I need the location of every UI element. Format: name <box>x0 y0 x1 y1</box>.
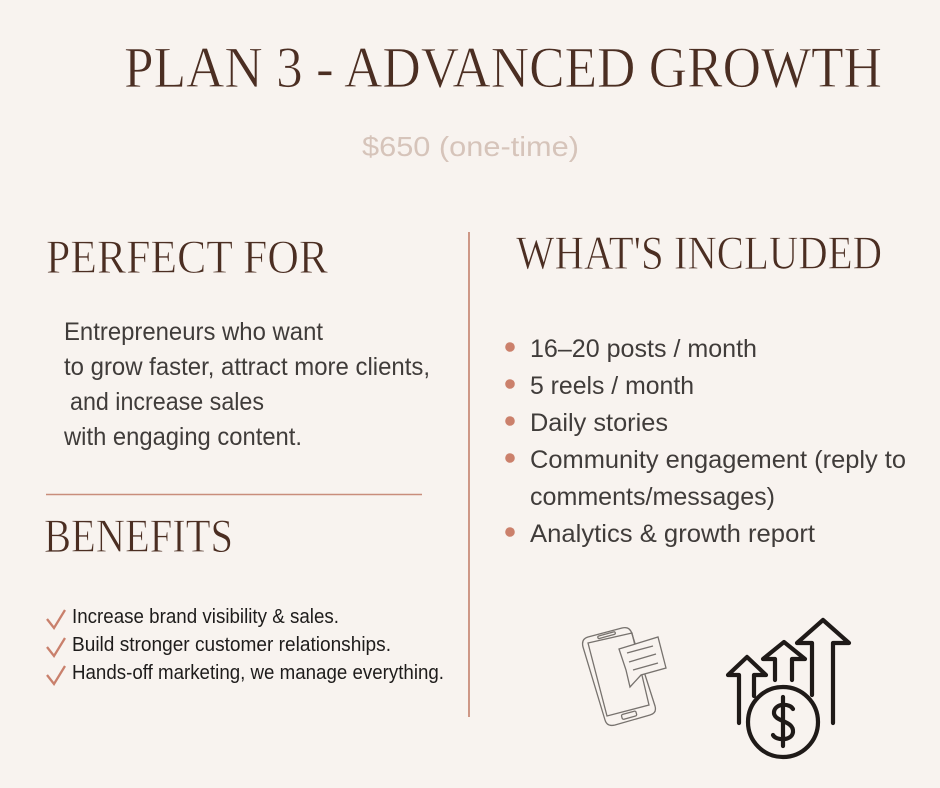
list: included items: Daily stories <box>530 409 668 437</box>
text block: audience description: with engaging content. <box>63 423 302 451</box>
heading: perfect for: PERFECT FOR <box>46 231 328 284</box>
list: included items: Analytics & growth report <box>530 520 815 548</box>
list: included items: 5 reels / month <box>530 372 694 400</box>
panel: benefits <box>44 510 444 684</box>
text block: audience description: and increase sales <box>70 388 264 416</box>
benefit: brand visibility: Increase brand visibility & sales. <box>72 606 339 628</box>
text block: audience description: Entrepreneurs who want <box>64 318 323 346</box>
list: included items <box>505 335 906 548</box>
list: included items: 16–20 posts / month <box>530 335 757 363</box>
icon: phone with message bubble <box>583 628 666 725</box>
list: included items: comments/messages) <box>530 483 775 511</box>
text block: audience description <box>63 318 430 451</box>
heading: what's included: WHAT'S INCLUDED <box>516 227 882 280</box>
benefit: hands-off marketing: Hands-off marketing, we manage everything. <box>72 662 444 684</box>
list: included items: Community engagement (reply to <box>530 446 906 474</box>
panel: what's included <box>505 227 906 548</box>
text block: audience description: to grow faster, attract more clients, <box>64 353 430 381</box>
heading: benefits: BENEFITS <box>44 510 233 563</box>
title: PLAN 3 - ADVANCED GROWTH <box>124 35 882 100</box>
benefit: customer relationships: Build stronger customer relationships. <box>72 634 391 656</box>
icon: growth arrows with dollar coin <box>728 620 849 757</box>
panel: perfect for <box>46 231 430 451</box>
price: $650 (one-time) <box>362 131 579 162</box>
